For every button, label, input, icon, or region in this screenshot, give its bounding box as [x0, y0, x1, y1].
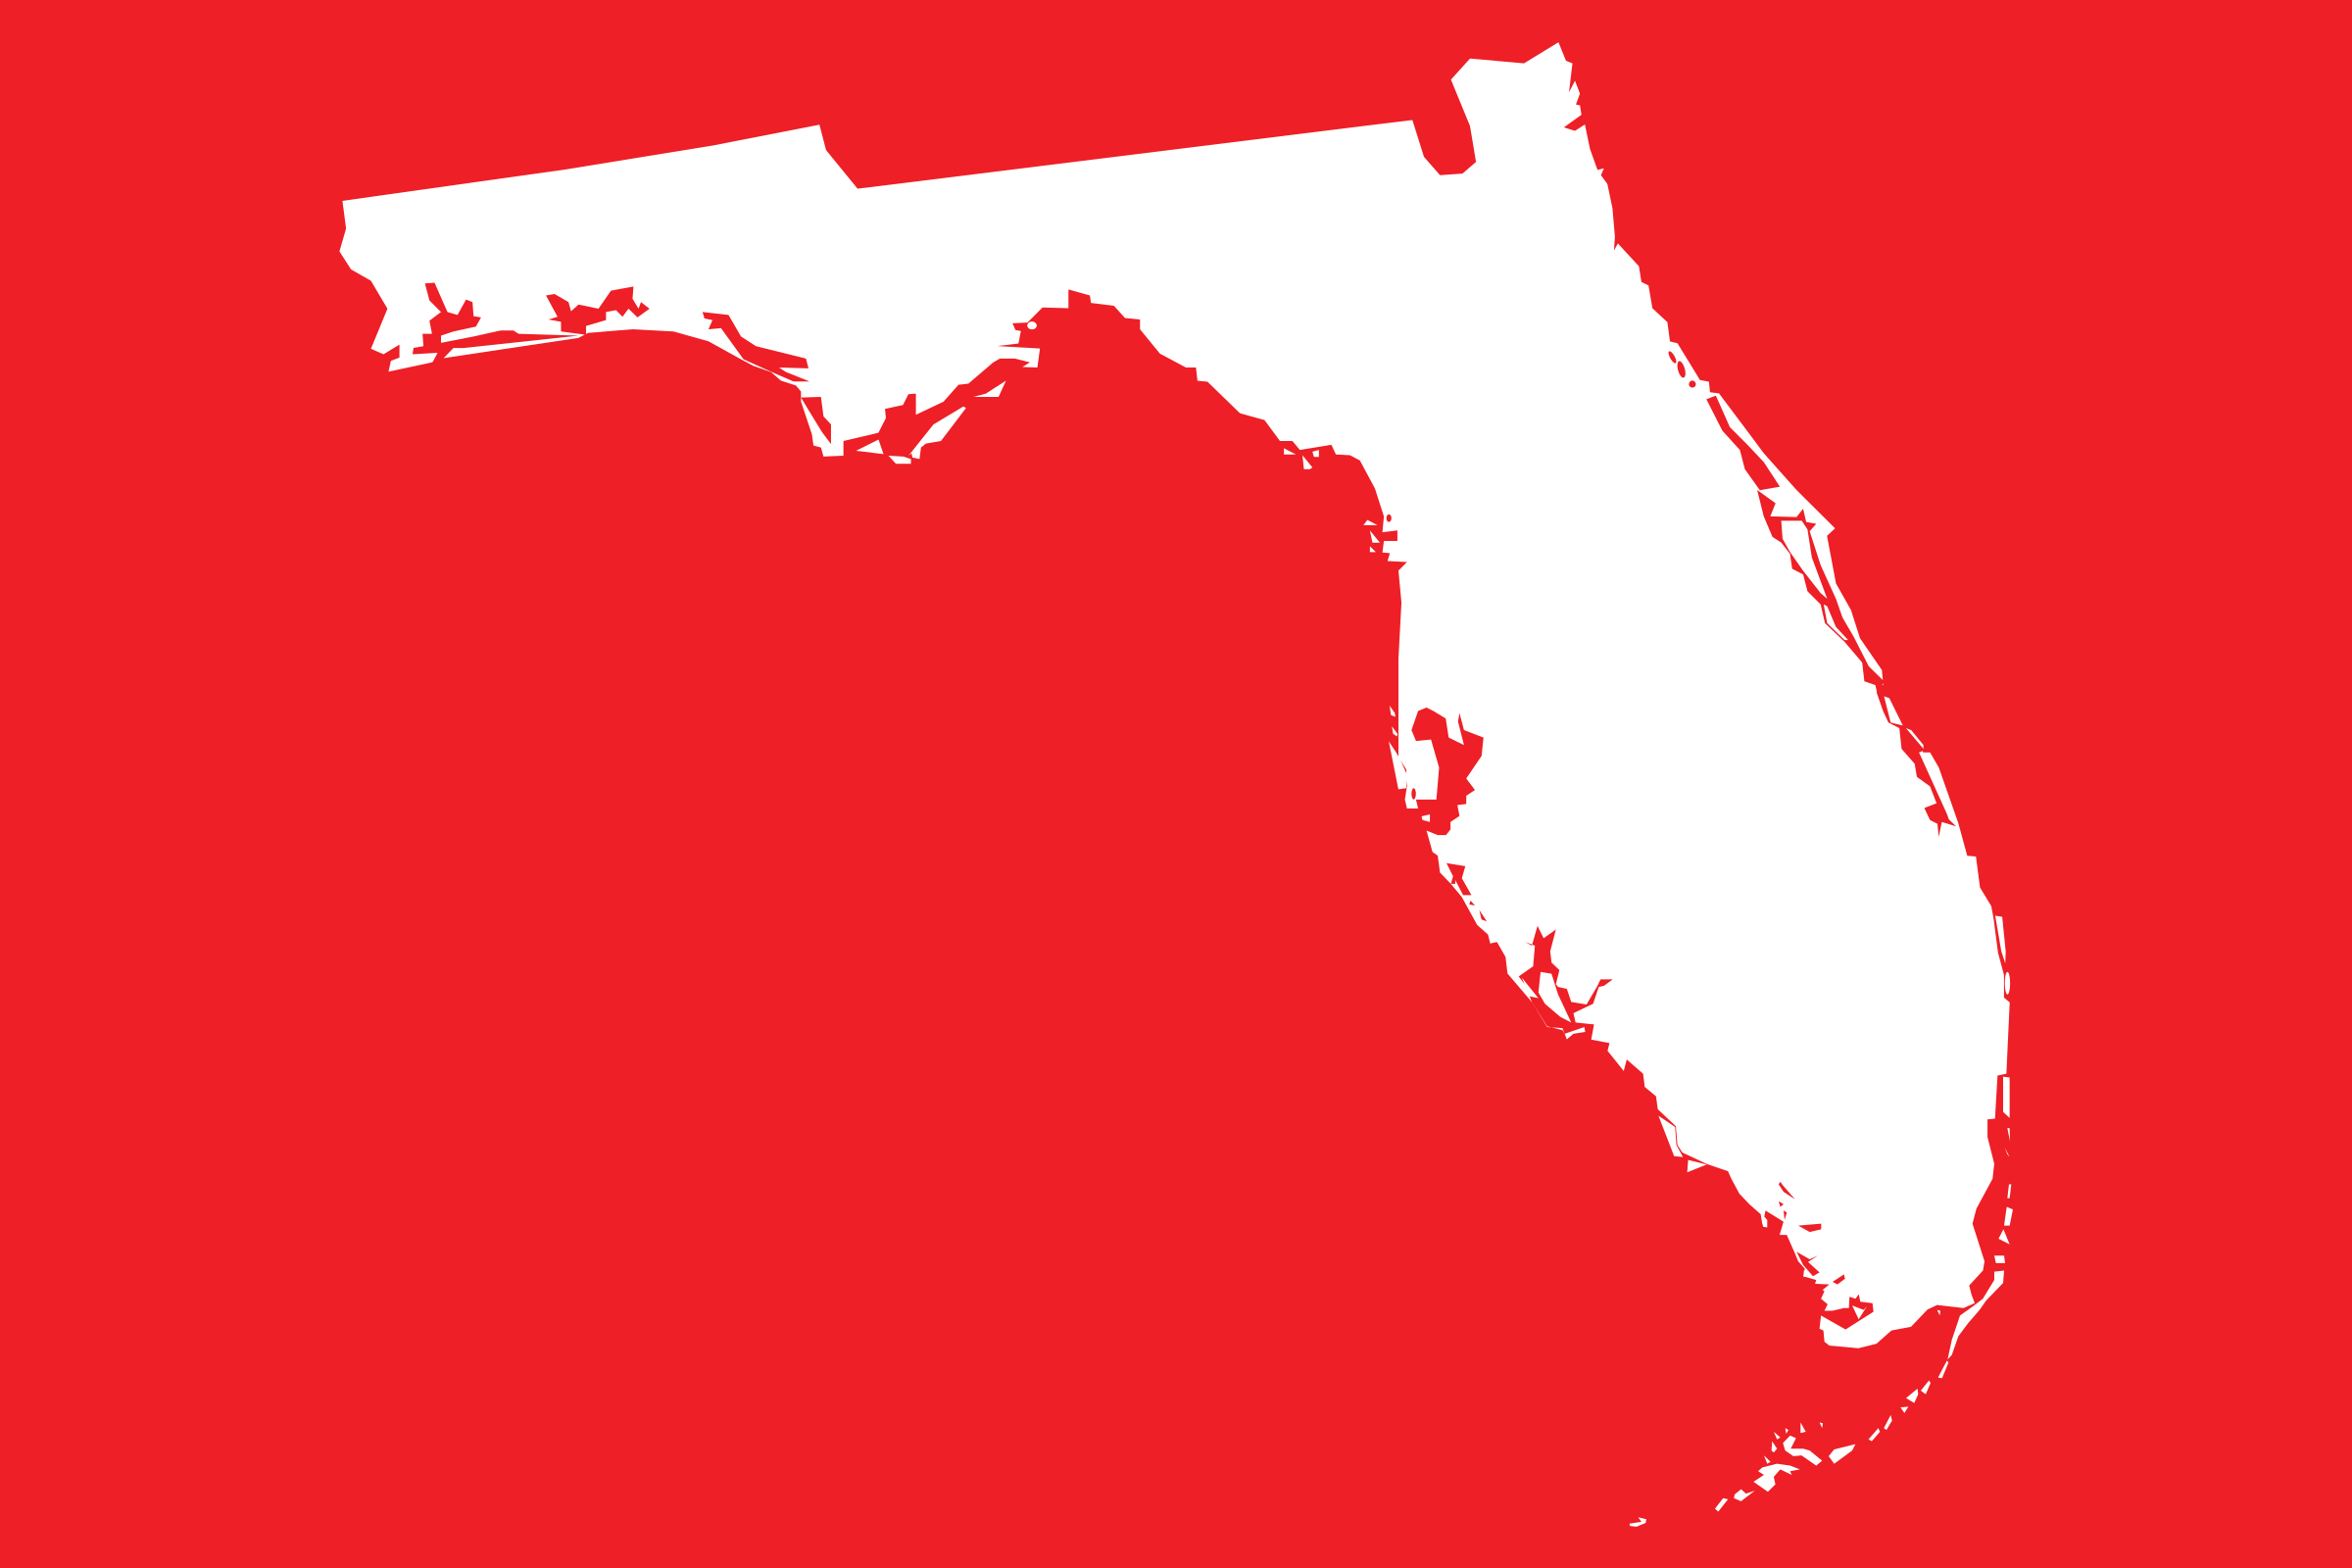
Atlantic and Gulf islets: [1658, 1077, 2013, 1319]
Sarasota and Charlotte inlets: [1411, 788, 1613, 1042]
south Florida islands and Keys: [1630, 1077, 2013, 1527]
state outline: mainland: [339, 42, 2010, 1348]
barrier islands: Apalachicola: [857, 321, 1037, 464]
panhandle bays and lagoons: [413, 283, 831, 444]
northeast coast lagoon: [1387, 351, 1780, 522]
Key Largo: [1947, 1271, 2004, 1359]
barrier slivers: [1389, 697, 2010, 995]
Pine Island and Sanibel: [1522, 972, 1586, 1040]
southwest mangrove inlets: [1779, 1182, 1845, 1295]
Atlantic lagoons and Tampa area detail: [1389, 490, 2010, 1042]
Indian River lagoon: [1757, 490, 1885, 695]
small lagoon islet: [1824, 605, 1848, 640]
gulf coast islets: [1284, 448, 1380, 552]
Merritt Island: [1782, 520, 1827, 599]
southern lagoon: [1877, 685, 1956, 837]
Florida Keys: [1630, 1360, 1948, 1527]
